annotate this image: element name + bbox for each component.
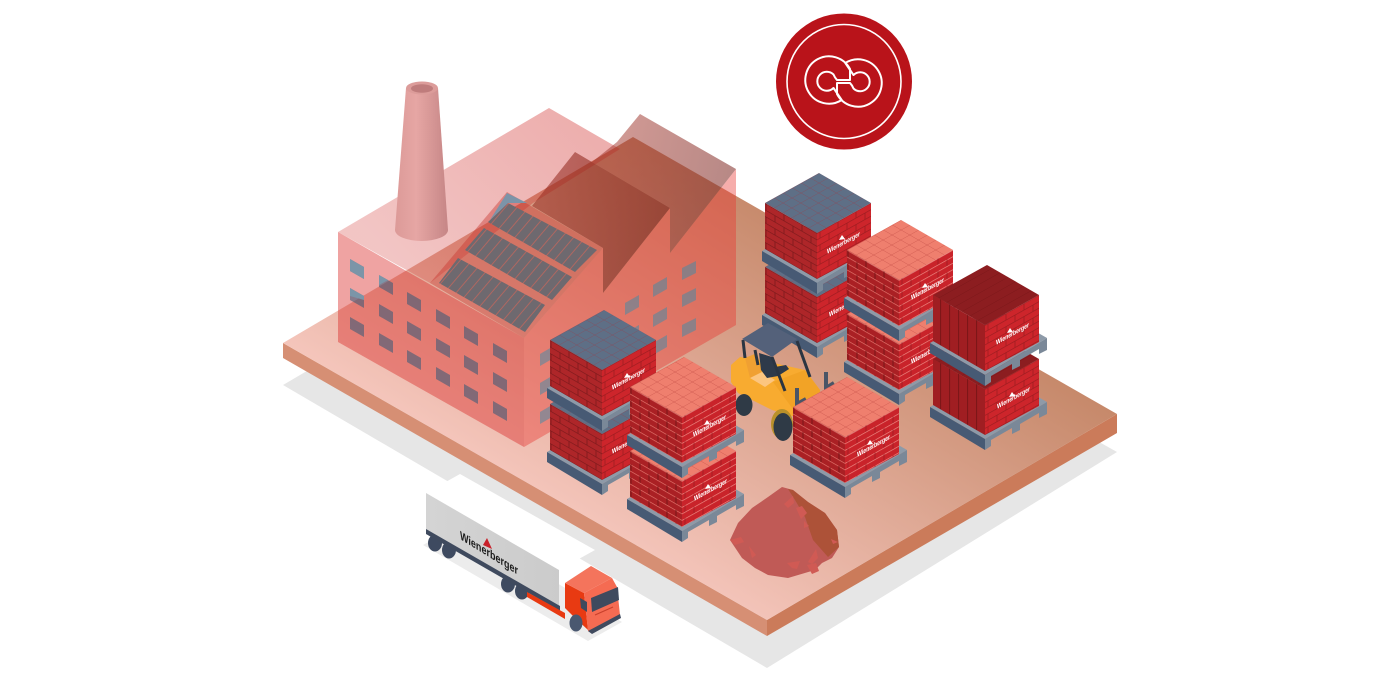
brick stack: dark red top xyxy=(930,265,1047,450)
forklift seat xyxy=(759,353,789,378)
chimney xyxy=(395,82,448,241)
logo lower tier: Wienerberger xyxy=(612,429,645,456)
brick stack: front grey top xyxy=(547,310,664,495)
brick stack: back salmon top xyxy=(844,220,961,405)
forklift body xyxy=(731,357,820,417)
window highlights above floor edge xyxy=(350,259,388,300)
factory building xyxy=(338,82,736,447)
solar roof slope xyxy=(430,192,603,338)
factory left wall xyxy=(338,232,524,447)
logo upper tier: Wienerberger xyxy=(612,365,645,392)
factory yard platform xyxy=(283,137,1117,636)
trailer wheels xyxy=(428,534,529,600)
logo lower tier: Wienerberger xyxy=(829,292,862,319)
logo upper tier xyxy=(827,229,860,256)
raw clay pile xyxy=(730,487,839,578)
factory sawtooth end wall xyxy=(524,169,736,447)
delivery truck xyxy=(423,474,622,641)
third sawtooth roof xyxy=(592,114,736,253)
circular economy badge xyxy=(776,14,912,150)
forks xyxy=(797,372,834,404)
logo upper tier xyxy=(693,412,726,439)
logo upper tier: Wienerberger xyxy=(996,320,1029,347)
logo upper tier xyxy=(911,275,944,302)
brick stack: front salmon top xyxy=(627,357,744,542)
logo upper tier: Wienerberger xyxy=(911,275,944,302)
rear wheel xyxy=(736,394,752,416)
ground shadow of platform xyxy=(283,180,1117,668)
logo upper tier xyxy=(996,320,1029,347)
brick stack: back grey top xyxy=(762,173,879,358)
logo lower tier xyxy=(997,384,1030,411)
logo lower tier: Wienerberger xyxy=(694,476,727,503)
forklift footplate xyxy=(750,372,775,387)
logo lower tier xyxy=(694,476,727,503)
truck ground shadow xyxy=(423,525,622,641)
windows right wall xyxy=(540,261,696,424)
chassis xyxy=(527,592,565,619)
logo lower tier: Wienerberger xyxy=(997,384,1030,411)
forklift roof xyxy=(742,323,797,357)
brick stack: centre salmon single xyxy=(790,377,907,498)
logo upper tier xyxy=(612,365,645,392)
cab xyxy=(565,566,621,634)
front wheel xyxy=(771,409,793,439)
trailer top xyxy=(426,474,595,570)
solar panels xyxy=(439,193,597,332)
windows left wall xyxy=(350,259,507,421)
trailer logo mark xyxy=(483,538,492,549)
logo lower tier: Wienerberger xyxy=(911,339,944,366)
forklift cab frame xyxy=(743,340,810,391)
trailer underframe xyxy=(426,529,560,611)
trailer side xyxy=(426,493,559,607)
logo upper tier: Wienerberger xyxy=(693,412,726,439)
trailer wordmark: Wienerberger xyxy=(460,528,518,578)
second sawtooth roof xyxy=(532,152,670,293)
logo upper tier: Wienerberger xyxy=(827,229,860,256)
forklift xyxy=(731,323,834,441)
logo: Wienerberger xyxy=(857,432,890,459)
factory flat roof xyxy=(338,108,620,283)
interlocking loops icon xyxy=(805,56,882,107)
